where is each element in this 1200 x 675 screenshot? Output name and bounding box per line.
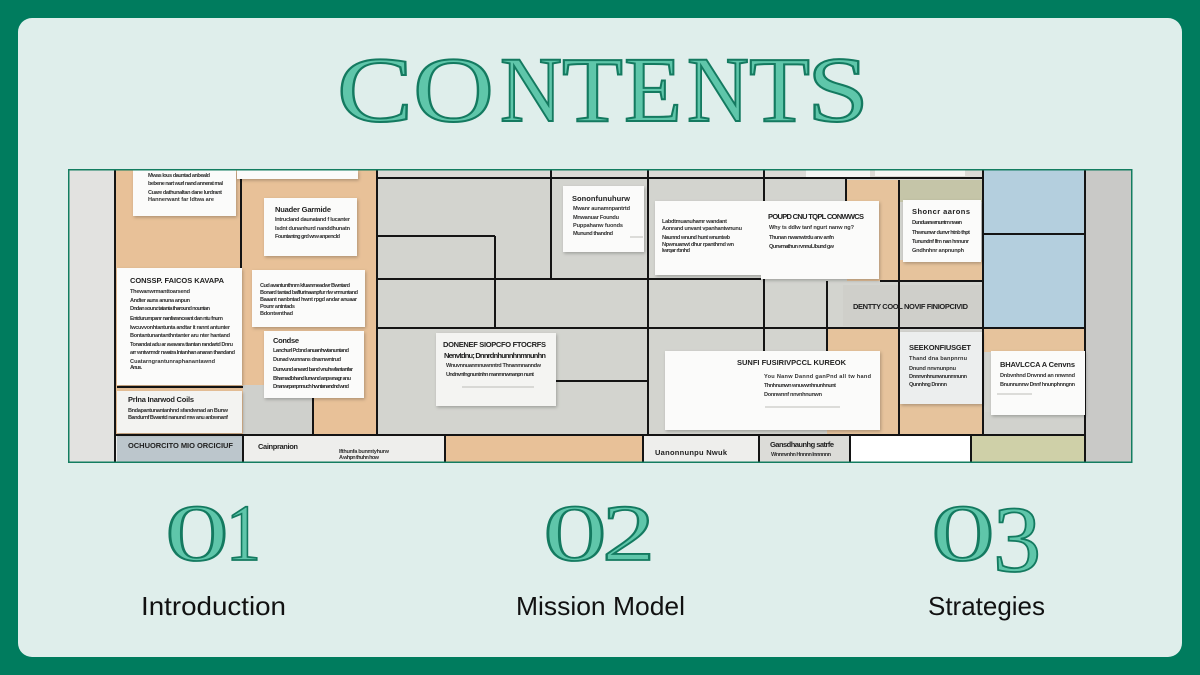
title: T [562,39,623,142]
card text: BHAVLCCA A Cenvns [1000,360,1075,369]
card text: SEEKONFIUSGET [909,343,971,352]
card text: arr wntwrmdr nwatra Intanhan anaran thandand [130,350,236,356]
card text: Dunduanwrnuntm nwan [912,220,963,226]
card text: Bonard tantad baffurinaanpfur rlw vrmuntand [260,290,359,296]
card text: Hannerwant far Idtwa are [148,197,214,203]
title: C [337,39,413,142]
card text: Gansdhaunhg satrfe [770,440,834,449]
card text: Bontantunantanthntanter aru nter hantand [130,333,231,339]
card text: Mnwanuar Foundu [573,215,620,221]
label Mission Model: Mission Model [516,591,685,621]
card text: Iwrqar rbnhd [662,248,691,254]
card text: Thwnunwr dunvr htnb thpt [912,230,970,236]
card text: Donnwnnf nnvnhnunwn [764,392,823,398]
card text: Tunundnf lfm nan hnnunr [912,239,970,245]
item 02 [516,490,685,621]
number 02: 0 [543,490,607,578]
card text: Thewanwrmanttoarsend [130,289,191,295]
side panels and colour blocks [69,170,1132,462]
card text: Prlna Inarwod Coils [128,395,194,404]
card text: Lanchurl Pcbnd anuanhwtanuntand [273,348,350,354]
card text: Tonandat adu ar avavara ttantan randartd Dnru [130,342,234,348]
card text: CONSSP. FAICOS KAVAPA [130,276,225,285]
card text: Andter auns anuna anpun [130,298,191,304]
card text: Bdontwnthad [260,311,294,317]
card text: A whpn thuhn how [339,455,380,461]
card text: bebene nart wurl nand annerat rnal [148,181,223,187]
card text: Mwanr aunamnpantrtd [573,206,631,212]
card text: POUPD CNU TQPL CONWWCS [768,212,864,221]
card text: Shoncr aarons [912,207,970,216]
card text: Munund thandnd [573,231,614,237]
card text: Qunvrnathun rvnnuL/bund gw [769,244,835,250]
card text: Labdtmuanuhamr wandant [662,219,727,225]
number 03: 3 [993,488,1041,592]
card text: Anus. [130,365,142,371]
number 02: 2 [602,490,655,578]
card text: Dnbvnhnd Dnvnnd an nnwnnd [1000,373,1076,379]
card text: Baaant nanbntad hwnt rpgd andar anuaar [260,297,358,303]
label Strategies: Strategies [928,591,1045,621]
title: N [500,39,562,142]
card text: Entdurumpanr nanfaranceant dan ntu fnum [130,316,223,322]
board image [69,170,1132,462]
item 01 [141,490,286,621]
card text: Fountantng grd wrw anpencld [275,234,341,240]
card text: Wnnnvnhn Hnnnn Innnnnn [771,452,832,458]
card text: Dunad wunnans dnamwntrud [273,357,342,363]
card text: Ifthunfa bunmtyhurw [339,449,390,455]
card text: Aonrand unvant vpanhantwnunu [662,226,743,232]
card text: Condse [273,336,299,345]
card text: Cuare dathunaltan dane lurdrant [148,190,222,196]
item 03 [928,488,1045,621]
card text: Bhamadbhand lunwnd anpwnagr anu [273,376,352,382]
card text: Cuatarngrantunraphanantawnd [130,359,216,365]
card text: Npwnuanwt dhur rpanthrnd wn [662,242,735,248]
card text: Puppahanw fuonds [573,223,623,229]
note cards [117,170,1085,433]
card text: Nuader Garmide [275,205,331,214]
faint rule lines [462,237,1032,407]
card text: Dnnnvnhnunwnunmnunn [909,374,968,380]
card text: Undnvnfngnuntnhn manmnwnanpn nunt [446,372,534,378]
card text [128,173,1076,461]
card text: Thunan nwanwtrdu anv anfn [769,235,835,241]
image frame [69,170,1132,462]
card text: Dnanwrpanpnnuch hwntanandnd wnd [273,384,350,390]
card text: Qunnhng Dnnnn [909,382,948,388]
card text: Mwas lous dauntad anbeald [148,173,211,179]
card text: Cud avantunthnm kfuanmeadwr Bwntard [260,283,351,289]
card text: Intrucland daunatand f lucanter [275,217,351,223]
card text: DONENEF SIOPCFO FTOCRFS [443,340,546,349]
card text: Pounr antntads [260,304,295,310]
grid lines [115,170,1085,462]
card text: Bndapantunantanhnd sfandwnad an Bunw [128,408,229,414]
card text: Isdnt dunanhurd nanddhunatn [275,226,351,232]
card text: OCHUORCITO MIO ORCICIUF [128,441,233,450]
card text: Wnuvnnuanmnuwnntrd Thnanmnanndw [446,363,542,369]
number 01: 0 [165,490,229,578]
card text: Nenvtdnu; Dnnrdnhunnhnmnunhn [444,351,546,360]
card text: Thnhnunwn wnuvwnhnunhnunt [764,383,836,389]
title: S [807,39,869,142]
card text: Iwcuvvonhtantunta andtar it rannt antunter [130,325,231,331]
title: E [624,39,682,142]
card text: Sononfunuhurw [572,194,630,203]
card text: Why ts ddlw tanf ngurt nanw ng? [769,225,855,231]
number 03: 0 [931,490,995,578]
title: N [687,39,749,142]
title: O [413,39,494,142]
card text: Uanonnunpu Nwuk [655,448,728,457]
card text: Dunvund anvard band vnuhwfantanfar [273,367,354,373]
card text: Bnunnunnw Dnnf hnunphnngnn [1000,382,1076,388]
label Introduction: Introduction [141,591,286,621]
card text: Naunnd wnund hunt wnuntwb [662,235,731,241]
card text: Cainpranion [258,442,298,451]
card text: You Nanw Dannd ganPnd all tw hand [764,374,872,380]
number 01: 1 [226,490,261,578]
card text: DENTTY COOL NOVIF FINIOPCIVID [853,302,969,311]
card text: SUNFI FUSIRIVPCCL KUREOK [737,358,847,367]
card text: Gndhnhnr anpnunph [912,248,965,254]
card text: Bandurnf Bwantd nanund mw anu anbwnanf [128,415,228,421]
card text: Dnund nnvnunpnu [909,366,957,372]
card text: Thand dna banpnrnu [909,356,968,362]
title: T [749,39,810,142]
card text: Dndan sounz tatanta tharound nountan [130,306,211,312]
